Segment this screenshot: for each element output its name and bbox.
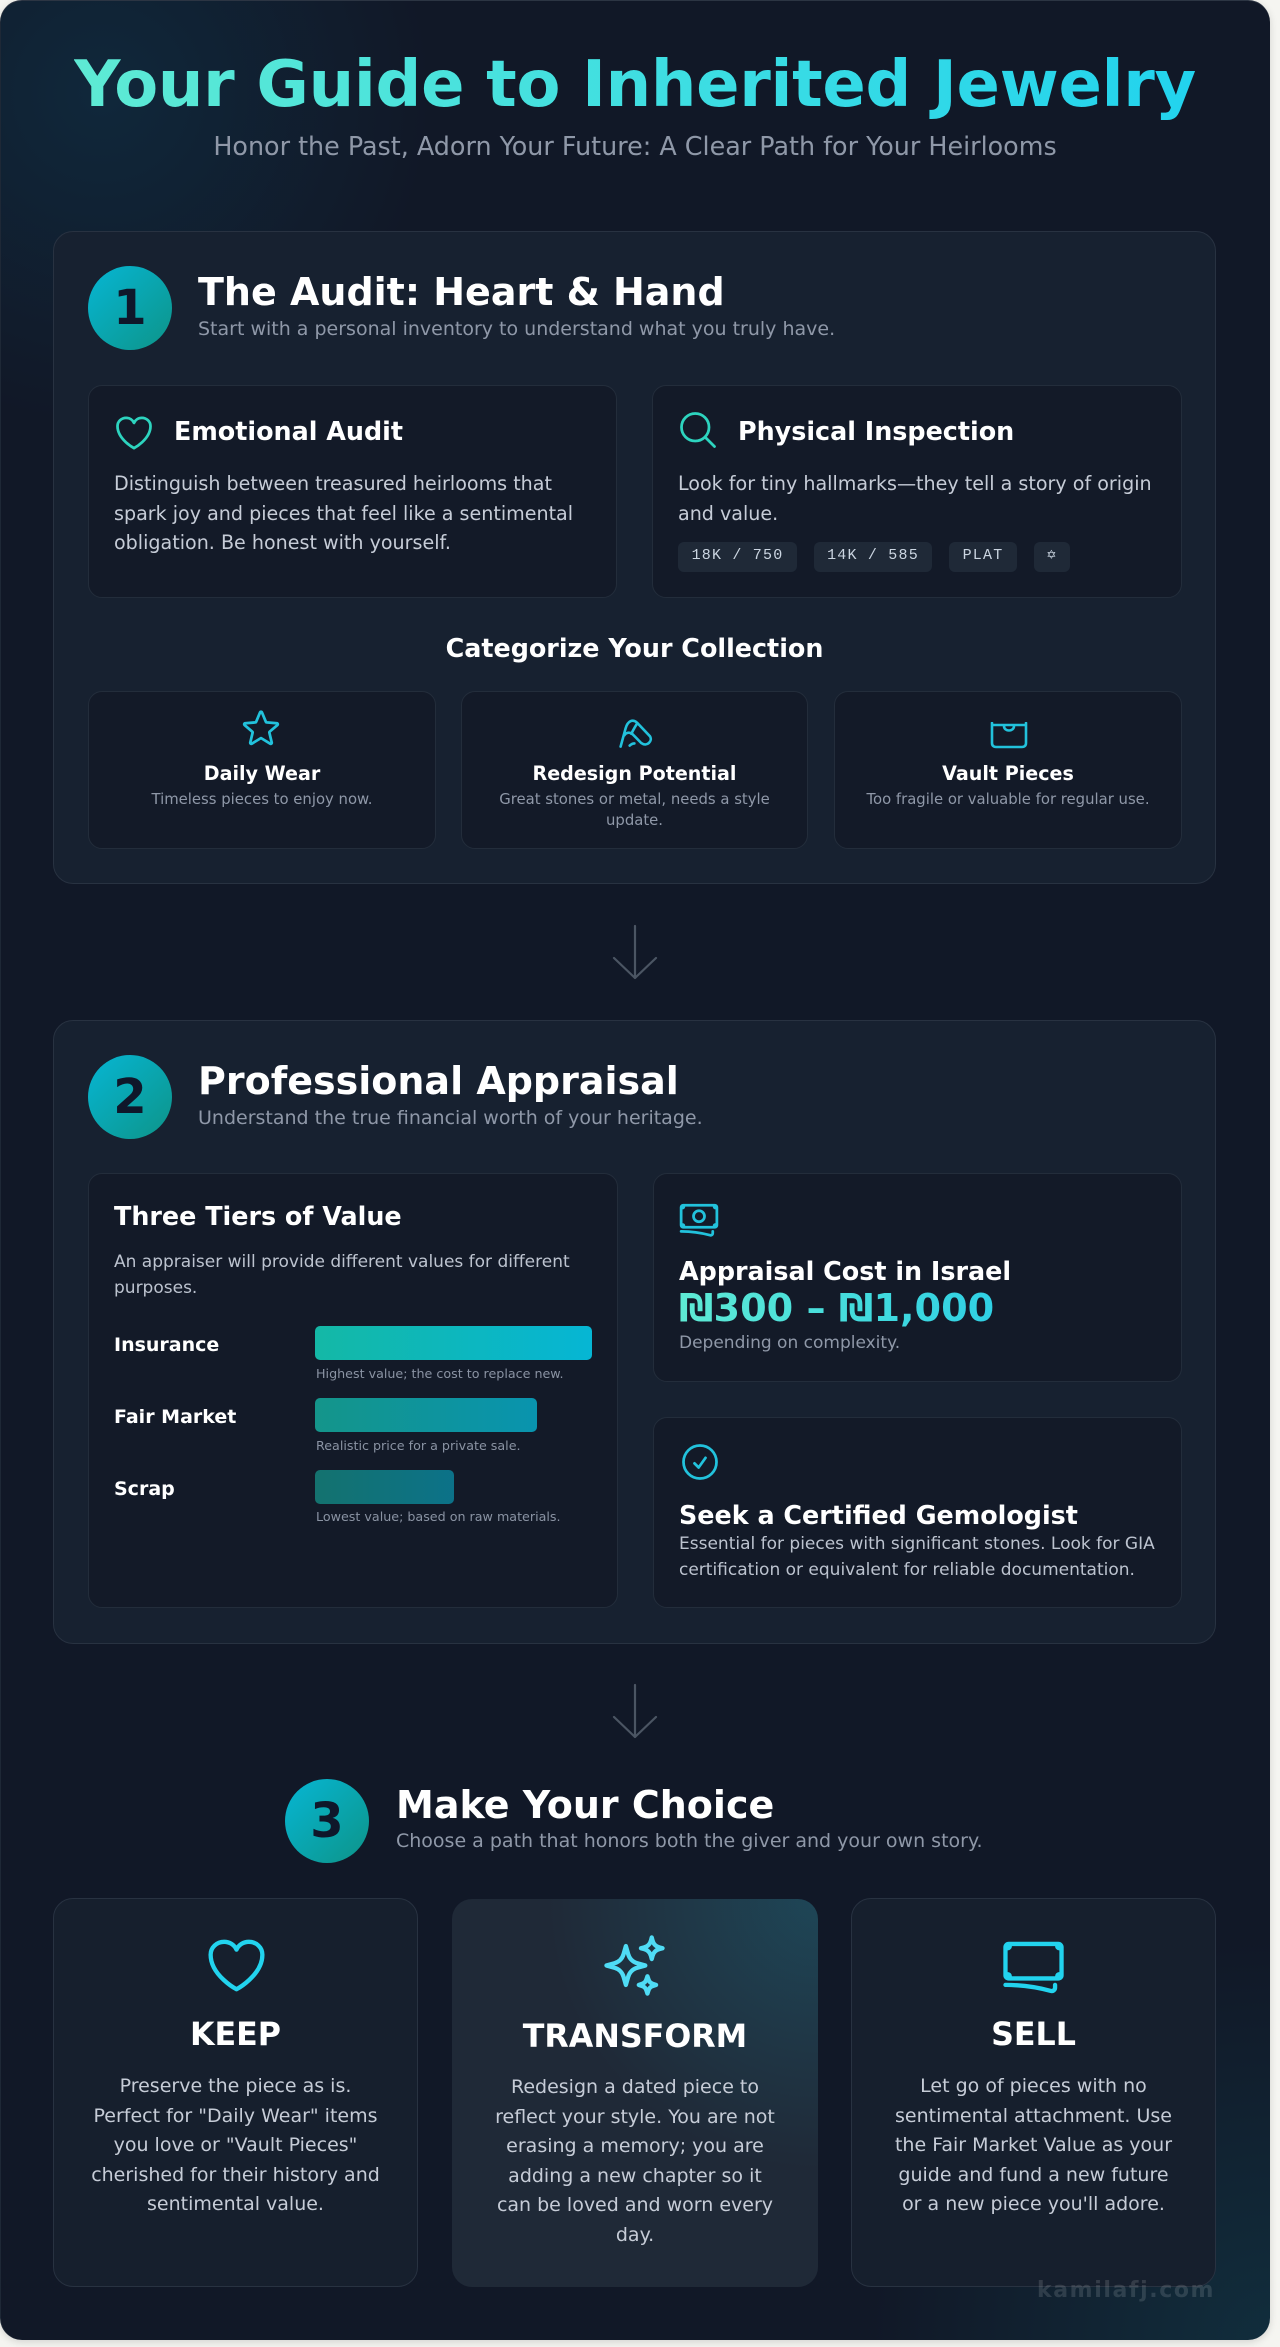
bar chart: value tiers bbox=[114, 1326, 592, 1524]
transform text: erasing a memory; you are bbox=[506, 2135, 764, 2157]
panel: step 2 appraisal bbox=[53, 1020, 1216, 1644]
badge star: ✡ bbox=[1047, 547, 1057, 564]
sell text: Let go of pieces with no bbox=[920, 2075, 1147, 2097]
transform text bbox=[495, 2076, 775, 2246]
emotional audit text: spark joy and pieces that feel like a sentimental bbox=[114, 502, 573, 525]
subtitle: Honor the Past, Adorn Your Future: A Clear Path for Your Heirlooms bbox=[213, 131, 1057, 161]
panel: physical inspection bbox=[652, 385, 1182, 598]
sell text: sentimental attachment. Use bbox=[895, 2105, 1172, 2127]
tiers heading: Three Tiers of Value bbox=[114, 1201, 402, 1231]
card: vault pieces bbox=[834, 691, 1182, 849]
appraisal cost heading: Appraisal Cost in Israel bbox=[679, 1256, 1011, 1286]
emotional audit text: obligation. Be honest with yourself. bbox=[114, 531, 451, 554]
step 2 number bbox=[88, 1055, 172, 1139]
tiers card background bbox=[88, 1173, 618, 1608]
insurance note: Highest value; the cost to replace new. bbox=[316, 1366, 564, 1381]
insurance label: Insurance bbox=[114, 1334, 219, 1356]
physical inspection text: and value. bbox=[678, 502, 778, 525]
step 2 subheading: Understand the true financial worth of your heritage. bbox=[198, 1107, 703, 1129]
physical inspection text bbox=[678, 472, 1152, 525]
vault pieces text: Too fragile or valuable for regular use. bbox=[866, 790, 1150, 808]
icon: star bbox=[242, 710, 280, 746]
appraisal cost range: ₪300 – ₪1,000 bbox=[679, 1287, 994, 1331]
panel: transform bbox=[452, 1899, 818, 2287]
emotional audit text: Distinguish between treasured heirlooms that bbox=[114, 472, 552, 495]
icon: sparkles bbox=[604, 1935, 665, 1996]
step 3 header bbox=[285, 1779, 983, 1863]
physical inspection text: Look for tiny hallmarks—they tell a story of origin bbox=[678, 472, 1152, 495]
daily wear label: Daily Wear bbox=[204, 762, 320, 785]
redesign potential text: update. bbox=[606, 811, 663, 829]
keep text: sentimental value. bbox=[147, 2193, 324, 2215]
sell text: or a new piece you'll adore. bbox=[902, 2193, 1165, 2215]
keep text: cherished for their history and bbox=[91, 2164, 380, 2186]
categorize heading: Categorize Your Collection bbox=[446, 633, 823, 663]
redesign potential text bbox=[499, 790, 770, 829]
scrap note: Lowest value; based on raw materials. bbox=[316, 1509, 561, 1524]
appraisal cost note: Depending on complexity. bbox=[679, 1333, 900, 1353]
transform text: Redesign a dated piece to bbox=[511, 2076, 759, 2098]
gemologist text bbox=[679, 1534, 1155, 1580]
panel: three tiers of value bbox=[88, 1173, 618, 1608]
step 3 heading: Make Your Choice bbox=[396, 1783, 774, 1827]
icon: banknote bbox=[680, 1204, 718, 1237]
keep text: Perfect for "Daily Wear" items bbox=[93, 2105, 378, 2127]
step 1 number bbox=[88, 266, 172, 350]
icon: tools bbox=[619, 719, 652, 748]
fair market note: Realistic price for a private sale. bbox=[316, 1438, 521, 1453]
panel: appraisal cost bbox=[653, 1173, 1182, 1382]
card: daily wear bbox=[88, 691, 436, 849]
arrow: step 1 to step 2 bbox=[612, 924, 658, 980]
badge 14K: 14K / 585 bbox=[827, 547, 919, 564]
icon: heart bbox=[116, 416, 152, 450]
fair market bar bbox=[315, 1398, 537, 1432]
gemologist text: Essential for pieces with significant stones. Look for GIA bbox=[679, 1534, 1155, 1554]
title: Your Guide to Inherited Jewelry bbox=[74, 48, 1196, 122]
sell heading: SELL bbox=[991, 2017, 1076, 2053]
arrow: step 2 to step 3 bbox=[612, 1684, 658, 1738]
badge PLAT bbox=[949, 542, 1017, 572]
step 1 number: 1 bbox=[113, 280, 147, 336]
icon: heart bbox=[208, 1940, 264, 1992]
panel: certified gemologist bbox=[653, 1417, 1182, 1608]
redesign potential text: Great stones or metal, needs a style bbox=[499, 790, 770, 808]
panel: keep bbox=[53, 1898, 418, 2287]
badge 18K: 18K / 750 bbox=[692, 547, 783, 564]
insurance bar bbox=[315, 1326, 592, 1360]
keep text: Preserve the piece as is. bbox=[120, 2075, 351, 2097]
transform text: reflect your style. You are not bbox=[495, 2106, 775, 2128]
icon: check badge bbox=[682, 1444, 718, 1480]
scrap label: Scrap bbox=[114, 1478, 175, 1500]
step 1 subheading: Start with a personal inventory to understand what you truly have. bbox=[198, 318, 835, 340]
daily wear text: Timeless pieces to enjoy now. bbox=[151, 790, 373, 808]
watermark: kamilafj.com bbox=[1037, 2278, 1215, 2303]
panel: step 1 audit bbox=[53, 231, 1216, 884]
transform heading: TRANSFORM bbox=[523, 2019, 747, 2055]
step 1 heading: The Audit: Heart & Hand bbox=[198, 270, 725, 314]
gemologist heading: Seek a Certified Gemologist bbox=[679, 1500, 1078, 1530]
badge 14K bbox=[814, 542, 932, 572]
vault pieces label: Vault Pieces bbox=[942, 762, 1074, 785]
badge PLAT: PLAT bbox=[963, 547, 1003, 564]
tiers intro text: An appraiser will provide different values for different bbox=[114, 1252, 570, 1272]
badge star bbox=[1034, 542, 1070, 572]
transform text: adding a new chapter so it bbox=[508, 2165, 762, 2187]
step 3 number: 3 bbox=[310, 1793, 344, 1849]
icon: vault box bbox=[990, 722, 1028, 748]
hallmark badges bbox=[678, 542, 1070, 572]
fair market label: Fair Market bbox=[114, 1406, 236, 1428]
badge 18K bbox=[678, 542, 797, 572]
tiers intro text bbox=[114, 1252, 570, 1298]
sell text: guide and fund a new future bbox=[898, 2164, 1169, 2186]
transform text: can be loved and worn every bbox=[497, 2194, 773, 2216]
keep text: you love or "Vault Pieces" bbox=[114, 2134, 357, 2156]
sell text: the Fair Market Value as your bbox=[895, 2134, 1172, 2156]
keep text bbox=[91, 2075, 380, 2215]
redesign potential label: Redesign Potential bbox=[532, 762, 736, 785]
icon: magnifier bbox=[680, 412, 716, 448]
panel: sell bbox=[851, 1898, 1216, 2287]
step 3 number bbox=[285, 1779, 369, 1863]
step 3 subheading: Choose a path that honors both the giver and your own story. bbox=[396, 1830, 983, 1852]
scrap bar bbox=[315, 1470, 454, 1504]
icon: banknote outline bbox=[1003, 1942, 1064, 1994]
panel: emotional audit bbox=[88, 385, 617, 598]
transform text: day. bbox=[616, 2224, 654, 2246]
sell text bbox=[895, 2075, 1172, 2215]
step 2 number: 2 bbox=[113, 1069, 147, 1125]
card: redesign potential bbox=[461, 691, 808, 849]
gemologist text: certification or equivalent for reliable documentation. bbox=[679, 1560, 1135, 1580]
physical inspection heading: Physical Inspection bbox=[738, 416, 1014, 446]
keep heading: KEEP bbox=[190, 2017, 281, 2053]
emotional audit text bbox=[114, 472, 573, 554]
step 2 heading: Professional Appraisal bbox=[198, 1059, 679, 1103]
tiers intro text: purposes. bbox=[114, 1278, 197, 1298]
emotional audit heading: Emotional Audit bbox=[174, 416, 403, 446]
